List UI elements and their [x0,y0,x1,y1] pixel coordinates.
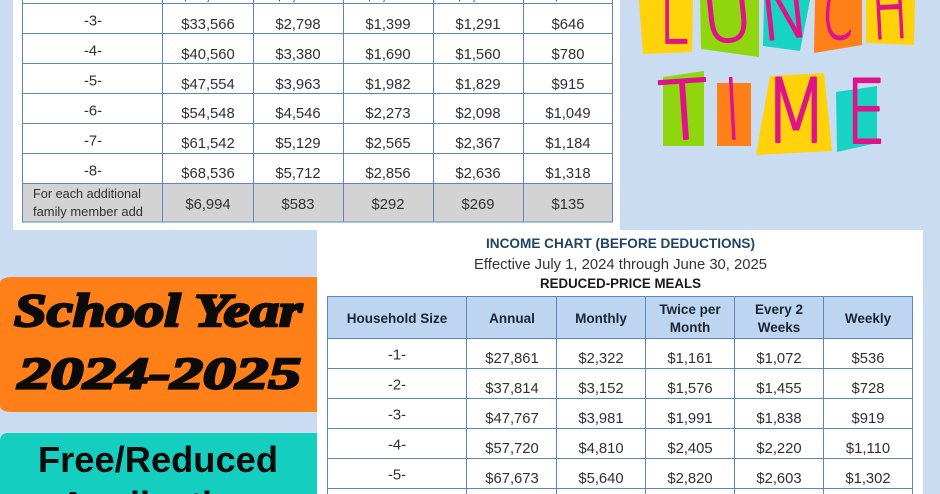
table titles: REDUCED-PRICE MEALS [540,276,701,291]
row: size 5: $5,640 [578,471,624,487]
row: size 6: -6- [84,104,102,120]
row: size 5: $1,829 [455,77,501,93]
row: size 6: $54,548 [181,106,235,122]
graphic: lunch time letter tiles: M [764,62,828,164]
header row: Twice per [659,302,721,317]
row: size 8: $2,856 [365,166,411,182]
row: size 1: $1,072 [756,351,802,367]
row: size 3: -3- [84,14,102,30]
banner: school year: 2024-2025 [17,349,301,398]
row: additional family member: $135 [552,197,584,213]
row: size 2: -2- [388,378,406,394]
panel: reduced-price meals income table [317,230,923,494]
graphic: lunch time letter tiles [639,0,915,165]
row: size 7: $2,367 [455,136,501,152]
row: size 6: $4,546 [275,106,321,122]
row: additional family member: For each additional [33,187,141,201]
table titles: Effective July 1, 2024 through June 30, 2025 [474,257,767,273]
row: size 3 [84,14,584,33]
table titles: INCOME CHART (BEFORE DEDUCTIONS) [486,236,755,251]
row: size 4: $780 [552,47,584,63]
row: size 8: $5,712 [275,166,321,182]
row: size 5: $2,820 [667,471,713,487]
row: additional family member: family member add [33,205,143,219]
graphic: lunch time letter tiles: I [723,63,742,160]
banner: school year [0,277,317,412]
panel: free meals income table [13,0,620,230]
row: size 2: $37,814 [485,381,539,397]
row: size 3: $3,981 [578,411,624,427]
row: size 2 [388,378,884,397]
row: size 8: $2,636 [455,166,501,182]
row: size 5 [388,468,891,487]
row: size 7: $61,542 [181,136,235,152]
header row: Household Size [347,311,448,326]
row: size 4: -4- [388,438,406,454]
row: additional family member [33,187,584,219]
row: additional family member: $292 [372,197,404,213]
row: size 4: $1,110 [846,441,890,457]
row: size 5: -5- [388,468,406,484]
row: size 3: $646 [552,17,584,33]
row: size 4: $2,405 [667,441,713,457]
row: size 2: $728 [852,381,884,397]
row: size 7: $2,565 [365,136,411,152]
row: size 4: $2,220 [756,441,802,457]
row: size 4: $1,560 [455,47,501,63]
row: size 3: -3- [388,408,406,424]
row: size 5: -5- [84,74,102,90]
table titles [474,236,767,291]
row: size 4: $3,380 [275,47,321,63]
row: size 3: $2,798 [275,17,321,33]
row: size 5: $1,982 [365,77,411,93]
row: size 6: $2,273 [365,106,411,122]
row: size 1: $1,161 [667,351,713,367]
banner: free/reduced application: Free/Reduced [38,439,278,480]
row: size 5 [84,74,584,93]
header row: Month [670,320,710,335]
row: size 2 clipped [181,0,584,4]
row: size 7: $1,184 [545,136,591,152]
row: size 5: $915 [552,77,584,93]
row: size 1: -1- [388,348,406,364]
header row: Annual [489,311,535,326]
row: size 3: $1,991 [667,411,713,427]
row: size 4 [84,44,584,63]
row: size 6 [84,104,591,122]
banner: school year: School Year [14,285,303,337]
row: size 6: $2,098 [455,106,501,122]
row: size 3: $33,566 [181,17,235,33]
row: size 8: -8- [84,164,102,180]
row: size 4: $1,690 [365,47,411,63]
row: size 3 [388,408,884,427]
row: size 4 [388,438,890,457]
header row: Weekly [845,311,892,326]
row: additional family member: $6,994 [185,197,231,213]
row: size 3: $47,767 [485,411,539,427]
row: size 5: $47,554 [181,77,235,93]
row: size 4: -4- [84,44,102,60]
row: additional family member: $583 [282,197,314,213]
header row: Monthly [575,311,627,326]
row: size 8: $1,318 [545,166,591,182]
header row [347,302,892,335]
row: size 5: $3,963 [275,77,321,93]
graphic: lunch time letter tiles: T [656,62,712,161]
row: size 3: $1,291 [455,17,501,33]
header row: Weeks [758,320,800,335]
row: size 1 [388,348,884,367]
row: additional family member: $269 [462,197,494,213]
header row: Every 2 [755,302,803,317]
row: size 1: $27,861 [485,351,539,367]
row: size 8 [84,164,591,182]
row: size 4: $57,720 [485,441,539,457]
row: size 2: $1,455 [756,381,802,397]
row: size 5: $1,302 [845,471,891,487]
row: size 5: $67,673 [485,471,539,487]
row: size 2: $3,152 [578,381,624,397]
row: size 1: $2,322 [578,351,624,367]
row: size 5: $2,603 [756,471,802,487]
row: size 6: $1,049 [545,106,591,122]
row: size 1: $536 [852,351,884,367]
row: size 3: $1,399 [365,17,411,33]
row: size 3: $919 [852,411,884,427]
row: size 2: $1,576 [667,381,713,397]
row: size 4: $40,560 [181,47,235,63]
row: size 3: $1,838 [756,411,802,427]
banner: free/reduced application [0,433,317,494]
row: size 4: $4,810 [578,441,624,457]
row: size 7: $5,129 [275,136,321,152]
row: size 8: $68,536 [181,166,235,182]
row: size 7 [84,134,591,152]
graphic: lunch time letter tiles: E [846,63,886,165]
row: size 7: -7- [84,134,102,150]
